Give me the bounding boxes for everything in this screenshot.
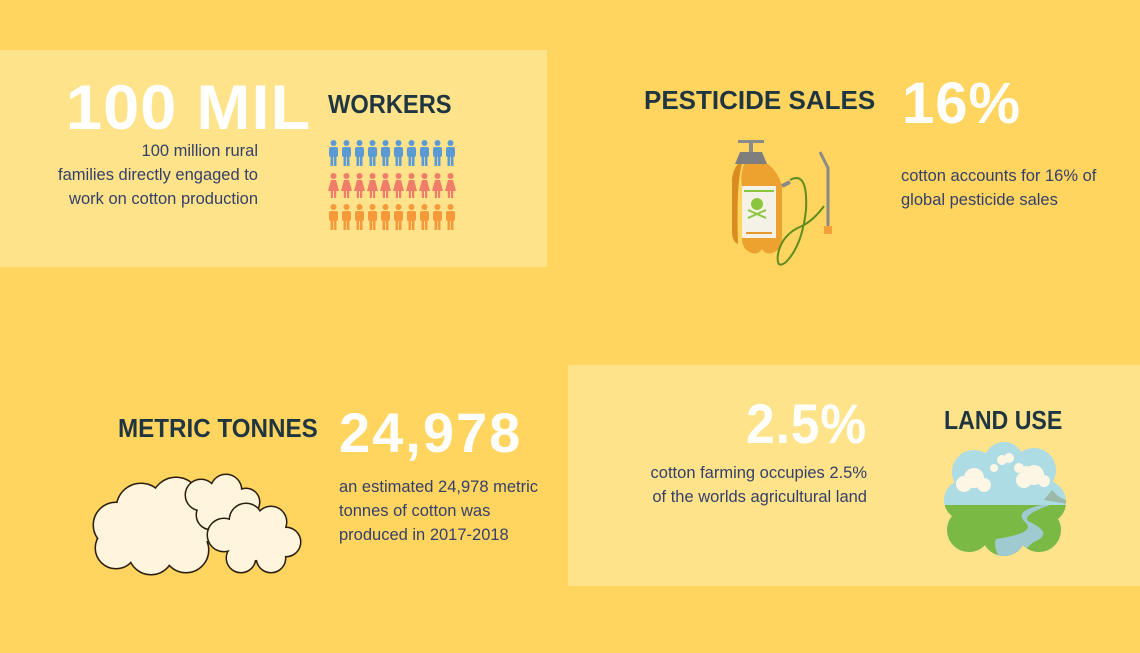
text: pesticide description [901, 167, 1096, 209]
text: workers description: families directly engaged to [58, 166, 258, 184]
text: tonnes description [339, 478, 538, 544]
icon: cotton clouds [92, 474, 302, 576]
text: tonnes description: tonnes of cotton was [339, 502, 490, 520]
heading: metric tonnes: METRIC TONNES [118, 413, 318, 443]
heading: land use: LAND USE [944, 405, 1062, 435]
icon: people grid [328, 140, 456, 230]
big number: 100 MIL: 100 MIL [66, 73, 311, 143]
text: pesticide description: cotton accounts for 16% of [901, 167, 1096, 185]
text: tonnes description: produced in 2017-2018 [339, 526, 509, 544]
big number: 24,978: 24,978 [339, 401, 522, 464]
big number: 16%: 16% [902, 71, 1021, 136]
text: pesticide description: global pesticide sales [901, 191, 1058, 209]
text: workers description: 100 million rural [142, 142, 258, 160]
big number: 2.5%: 2.5% [746, 392, 867, 455]
panel: land use [568, 365, 1140, 586]
text: workers description: work on cotton production [69, 190, 258, 208]
text: land use description [651, 464, 867, 506]
text: tonnes description: an estimated 24,978 metric [339, 478, 538, 496]
panel: workers [0, 50, 547, 267]
text: land use description: of the worlds agricultural land [652, 488, 867, 506]
icon: landscape [944, 442, 1066, 556]
text: workers description [58, 142, 258, 208]
text: land use description: cotton farming occupies 2.5% [651, 464, 867, 482]
icon: pesticide sprayer [732, 140, 832, 266]
heading: pesticide sales: PESTICIDE SALES [644, 85, 875, 115]
heading: workers: WORKERS [328, 89, 452, 119]
